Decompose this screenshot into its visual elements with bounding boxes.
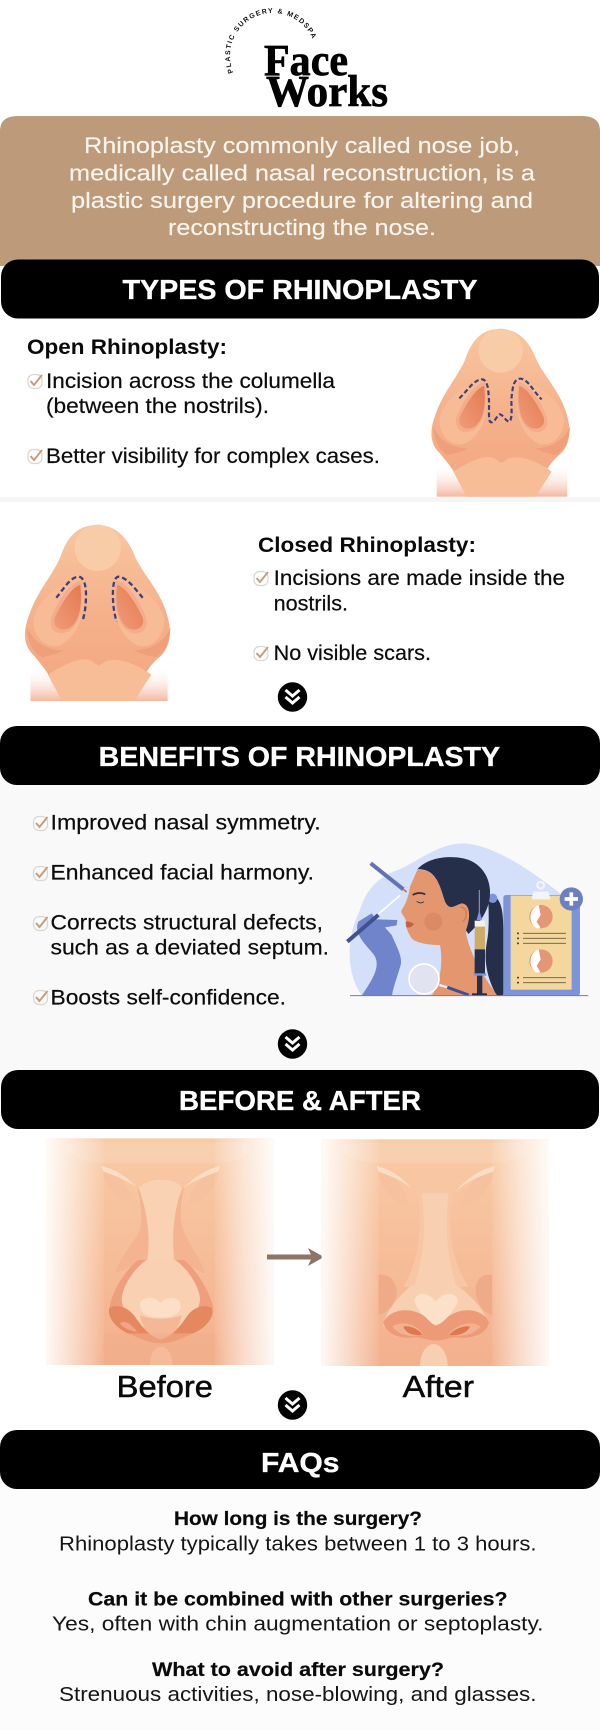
check icon	[28, 374, 42, 388]
intro text	[69, 133, 536, 240]
check icon	[34, 990, 48, 1004]
icon: open rhinoplasty nose	[431, 329, 570, 497]
benefit: harmony: Enhanced facial harmony.	[50, 860, 314, 884]
heading: benefits of rhinoplasty	[0, 726, 600, 785]
benefit: structural defects: Corrects structural defects,	[50, 910, 323, 934]
hair	[417, 857, 490, 934]
icon: chevron down	[278, 1029, 307, 1059]
scalpel	[347, 895, 400, 942]
icon: chevron down	[278, 1390, 307, 1420]
panel: benefits list	[34, 810, 329, 1010]
panel: open rhinoplasty text	[27, 336, 380, 468]
heading: FAQs: FAQs	[261, 1447, 340, 1478]
label: Before: Before	[117, 1369, 213, 1404]
bullet: incision across: Incision across the columella	[46, 369, 335, 393]
ponytail	[486, 895, 503, 996]
check icon	[34, 866, 48, 880]
gloved hand	[357, 913, 401, 996]
subheading: closed rhinoplasty: Closed Rhinoplasty:	[258, 534, 476, 557]
panel: closed rhinoplasty text	[254, 534, 565, 665]
faq question 2: Can it be combined with other surgeries?	[88, 1589, 508, 1611]
icon: chevron down	[278, 682, 307, 712]
heading: types of rhinoplasty	[1, 260, 599, 318]
intro text: medically called nasal reconstruction, is a	[69, 160, 536, 186]
check icon	[254, 646, 268, 660]
faq answer 2: Yes, often with chin augmentation or septoplasty.	[52, 1613, 544, 1636]
bullet continuation: (between the nostrils).	[46, 394, 269, 418]
faq answer 3: Strenuous activities, nose-blowing, and glasses.	[59, 1683, 536, 1706]
faq question 1: How long is the surgery?	[174, 1508, 422, 1530]
magnifying glass	[409, 964, 469, 995]
faq question 3: What to avoid after surgery?	[152, 1659, 444, 1681]
arrow: before to after	[267, 1248, 324, 1266]
divider	[0, 497, 600, 502]
bullet: incisions inside: Incisions are made inside the	[274, 566, 565, 590]
image: after nose	[322, 1139, 549, 1366]
heading: before and after: BEFORE & AFTER	[179, 1085, 421, 1116]
logo wordmark Face: Face	[264, 36, 348, 85]
check icon	[28, 450, 42, 464]
benefit continuation: such as a deviated septum.	[50, 936, 329, 960]
logo arc tagline: PLASTIC SURGERY & MEDSPA	[225, 8, 316, 74]
heading: FAQs	[0, 1430, 600, 1489]
panel: intro	[0, 116, 600, 266]
icon: closed rhinoplasty nose	[25, 525, 170, 701]
bullet: no visible scars: No visible scars.	[274, 641, 431, 665]
heading: types of rhinoplasty: TYPES OF RHINOPLASTY	[122, 274, 478, 305]
FAQ section background	[0, 1460, 600, 1730]
clipboard	[503, 882, 583, 996]
panel: FAQs	[52, 1508, 544, 1706]
bullet: better visibility: Better visibility for complex cases.	[46, 444, 380, 468]
check icon	[34, 916, 48, 930]
benefit: confidence: Boosts self-confidence.	[50, 986, 286, 1010]
logo wordmark Works: Works	[266, 67, 388, 116]
ground line	[350, 994, 588, 997]
subheading: open rhinoplasty: Open Rhinoplasty:	[27, 336, 227, 359]
bullet continuation: nostrils.	[274, 592, 348, 616]
intro text: reconstructing the nose.	[168, 215, 436, 240]
benefit: symmetry: Improved nasal symmetry.	[50, 810, 321, 834]
logo: Face Works	[225, 8, 388, 116]
heading: benefits of rhinoplasty: BENEFITS OF RHINOPLASTY	[99, 741, 500, 772]
benefits section background	[0, 745, 600, 1100]
heading: before and after	[1, 1070, 599, 1129]
check icon	[254, 572, 268, 586]
illustration: woman with clipboard and surgical tools	[347, 843, 588, 996]
faq answer 1: Rhinoplasty typically takes between 1 to 3 hours.	[59, 1533, 536, 1556]
syringe	[472, 890, 487, 996]
intro text: Rhinoplasty commonly called nose job,	[84, 133, 520, 158]
marker	[371, 863, 407, 892]
head and neck	[401, 870, 497, 996]
image: before nose	[47, 1138, 273, 1365]
check icon	[34, 816, 48, 830]
intro text: plastic surgery procedure for altering and	[71, 188, 533, 213]
label: After: After	[403, 1369, 474, 1404]
